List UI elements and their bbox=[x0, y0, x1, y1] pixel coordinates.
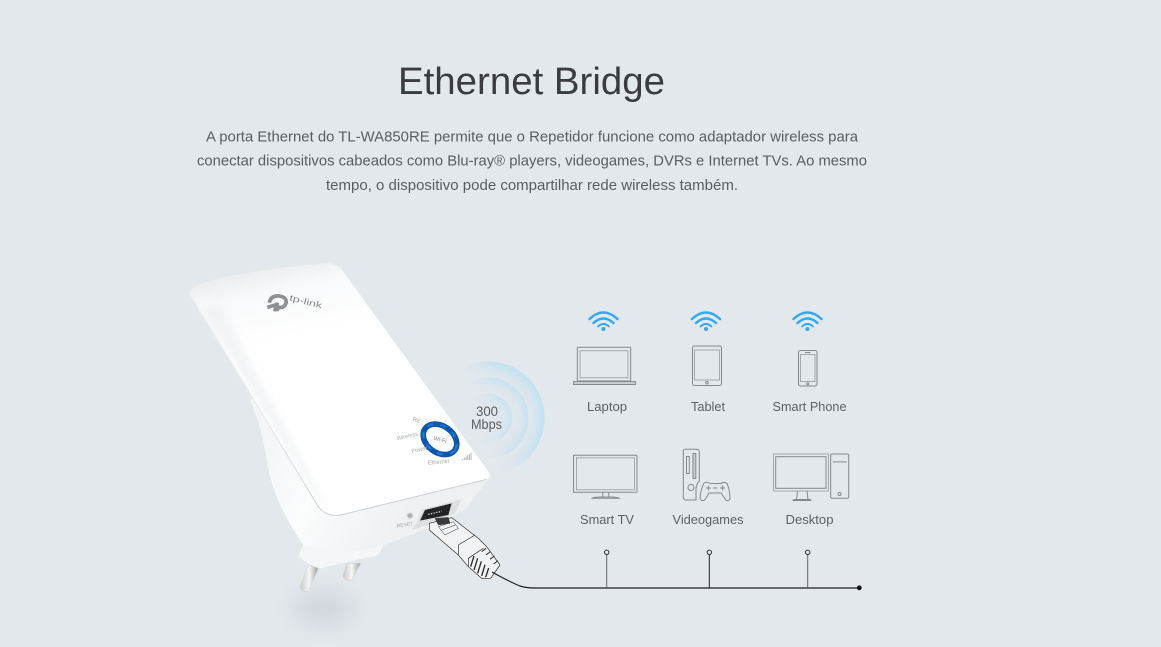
description text block: conectar dispositivos cabeados como Blu-ray® players, videogames, DVRs e Internet TVs. Ao mesmo bbox=[197, 154, 867, 170]
label: Desktop: Desktop bbox=[786, 512, 834, 527]
description text block: tempo, o dispositivo pode compartilhar rede wireless também. bbox=[326, 178, 738, 194]
speed label bbox=[471, 403, 502, 432]
drop: Videogames bbox=[707, 550, 712, 588]
LED labels bbox=[396, 417, 450, 467]
controller bbox=[700, 482, 730, 501]
speed label: Mbps bbox=[471, 416, 502, 432]
icon: desktop bbox=[774, 454, 849, 500]
LED labels: RE bbox=[412, 417, 421, 425]
floor shadow bbox=[292, 590, 355, 627]
description text block bbox=[197, 130, 867, 194]
label: Laptop: Laptop bbox=[587, 399, 627, 414]
connector joints bbox=[458, 535, 483, 567]
logo bbox=[267, 293, 324, 311]
signal mark bbox=[463, 453, 471, 460]
LED ring: Wi-Fi bbox=[433, 436, 447, 445]
connector contacts bbox=[435, 517, 450, 525]
drop: Desktop bbox=[806, 550, 810, 588]
icon: smart phone bbox=[798, 350, 817, 386]
ethernet connector bbox=[429, 517, 500, 578]
speed label: 300 bbox=[476, 403, 498, 419]
connector clip bbox=[438, 522, 458, 535]
label: Videogames: Videogames bbox=[672, 512, 744, 527]
plug base bbox=[298, 543, 383, 568]
icon: laptop bbox=[574, 347, 636, 384]
label: Smart Phone: Smart Phone bbox=[772, 399, 846, 414]
network cable bbox=[492, 572, 859, 588]
icon: wifi laptop bbox=[590, 312, 618, 331]
label: Smart TV: Smart TV bbox=[580, 512, 634, 527]
logo: tp-link bbox=[289, 293, 324, 311]
reset button: RESET bbox=[396, 521, 414, 529]
icon: wifi phone bbox=[794, 312, 822, 331]
label: Tablet: Tablet bbox=[691, 399, 725, 414]
icon: wifi tablet bbox=[692, 312, 720, 331]
icon: smart TV bbox=[574, 455, 637, 498]
product: wireless extender bbox=[190, 263, 500, 627]
icon: videogames bbox=[683, 449, 730, 501]
LED labels: Ethernet bbox=[428, 459, 450, 467]
face sheen bbox=[200, 303, 327, 507]
reset button bbox=[396, 513, 414, 529]
under-face shade bbox=[337, 478, 488, 522]
description text block: A porta Ethernet do TL-WA850RE permite que o Repetidor funcione como adaptador wireless para bbox=[206, 130, 859, 146]
console bbox=[683, 449, 699, 500]
LED labels: Power bbox=[411, 446, 428, 455]
device front face bbox=[190, 263, 490, 515]
logo mark bbox=[269, 296, 286, 311]
drop: Smart TV bbox=[604, 550, 609, 588]
face lip bbox=[194, 301, 487, 515]
LED labels: Wireless bbox=[396, 432, 419, 442]
plug pins bbox=[300, 563, 361, 592]
strain relief ribs bbox=[471, 556, 489, 577]
ethernet port bbox=[412, 499, 462, 530]
wireless signal waves with speed bbox=[472, 362, 545, 466]
device body bbox=[250, 350, 490, 551]
bus end dot bbox=[857, 585, 862, 590]
infographic canvas bbox=[190, 66, 866, 626]
title: Ethernet Bridge bbox=[398, 61, 665, 103]
LED ring bbox=[417, 418, 463, 461]
icon: tablet bbox=[692, 346, 722, 386]
